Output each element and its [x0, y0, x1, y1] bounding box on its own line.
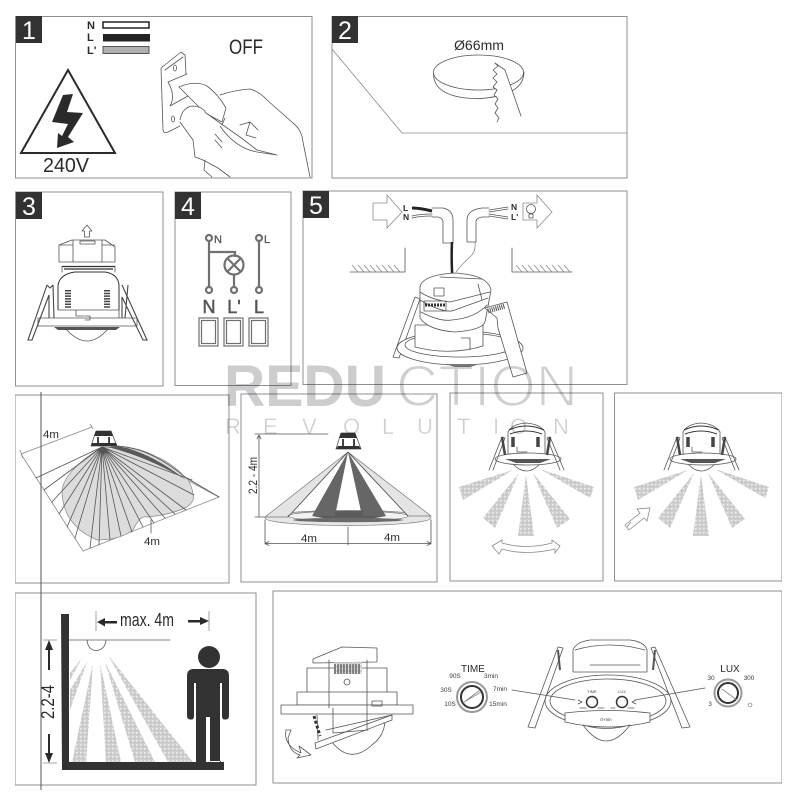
lower dimension tick [150, 520, 152, 533]
step badge 4 [175, 192, 201, 221]
dimension line [20, 424, 93, 458]
watermark word light part: CTION [396, 354, 578, 419]
panel 9: approach movement [614, 393, 782, 581]
terminal letters top: L [264, 234, 270, 246]
watermark word bold part: REDU [224, 354, 386, 419]
lux dial: ☼ [746, 699, 754, 709]
wire legend: L [87, 32, 94, 44]
dimension label 4m: 4m [43, 429, 59, 441]
panel 5: mains connection [303, 191, 627, 384]
panel 6: top-view detection zone [15, 395, 229, 583]
panel 11: adjustment dials [273, 591, 782, 783]
step badge 1: 1 [22, 17, 36, 45]
double curved arrow [492, 540, 560, 554]
wire legend: L' [87, 45, 97, 57]
beams [634, 469, 769, 536]
lux dial: 300 [744, 675, 755, 682]
detection zone [21, 446, 219, 551]
panel 8: lateral movement [450, 393, 603, 581]
watermark subtitle: REVOLUTION [225, 414, 569, 439]
beams [459, 469, 594, 536]
terminal labels: L' [227, 297, 241, 317]
dimension labels: 4m [384, 532, 400, 544]
icon: sensor body [393, 273, 527, 377]
icon: front sensor: TIME [587, 689, 597, 694]
wire labels [403, 202, 518, 222]
step badge 2: 2 [338, 17, 352, 45]
icon: front sensor: 0-min [600, 717, 612, 722]
wall sections [350, 248, 572, 272]
panel 3: remove terminal cover [16, 192, 163, 386]
time dial: 90S [449, 673, 461, 680]
terminal letters top [214, 234, 270, 246]
height label: 2.2-4 [38, 685, 58, 719]
step badge 3: 3 [22, 193, 36, 221]
time dial: 15min [489, 701, 507, 708]
wire labels: N [403, 212, 409, 222]
OFF label: OFF [229, 36, 263, 59]
light beams [70, 655, 193, 762]
pointer lines [512, 688, 705, 700]
vertical scan line [40, 392, 42, 790]
icon: hole and saw [434, 55, 524, 122]
dimension label 4m: 4m [144, 536, 160, 548]
detection cone [265, 452, 431, 526]
arrow toward sensor [625, 508, 650, 530]
arrow out with bulb [523, 195, 552, 228]
lux dial: LUX [720, 664, 740, 675]
wire legend [87, 20, 150, 57]
terminal boxes [199, 318, 268, 346]
time dial: 10S [444, 701, 456, 708]
time dial: 3min [484, 673, 498, 680]
step badge 5 [303, 191, 329, 220]
time dial: 7min [493, 686, 507, 693]
step badge 5: 5 [309, 192, 323, 220]
arrow in [373, 195, 402, 228]
watermark logo [224, 354, 578, 439]
panel 2: drill hole [332, 16, 627, 178]
wire legend: N [87, 20, 95, 32]
wall and floor [61, 614, 224, 770]
ceiling outline [332, 49, 627, 133]
range label: max. 4m [120, 610, 174, 630]
wire labels: L' [511, 212, 518, 222]
step badge 2 [332, 16, 358, 45]
panel 7: side-view detection cone [241, 394, 437, 582]
height dimension [43, 640, 57, 763]
step badge 1 [16, 16, 42, 45]
warning triangle with lightning bolt [21, 70, 115, 153]
wire labels: L [403, 203, 408, 213]
time dial: TIME [461, 664, 485, 675]
icon: side sensor with tilted head [281, 647, 413, 754]
icon: person [187, 646, 229, 762]
dimension labels [301, 532, 400, 545]
lux dial: 30 [707, 675, 715, 682]
icon: front sensor [528, 640, 690, 741]
time dial [440, 664, 507, 712]
icon: front sensor: LUX [618, 689, 626, 694]
height dimension [255, 434, 328, 517]
icon: sensor with cover lifted [28, 240, 147, 341]
lux dial: 3 [708, 701, 712, 708]
terminal labels: L [254, 297, 264, 317]
hole diameter label: Ø66mm [454, 38, 504, 53]
voltage label: 240V [43, 155, 90, 177]
terminal letters top: N [214, 234, 222, 246]
terminal labels: N [202, 297, 216, 317]
step badge 4: 4 [181, 193, 195, 221]
curved rotation arrow [286, 730, 311, 758]
panel 10: mounting height and range [15, 593, 256, 785]
terminal labels [202, 297, 264, 317]
icon: sensor top [91, 431, 117, 446]
icon: sensor [489, 423, 564, 471]
icon: sensor [336, 433, 361, 449]
arrow up [82, 225, 92, 237]
lux dial [707, 664, 755, 709]
panel 4: wiring diagram [175, 192, 291, 386]
time dial: 30S [440, 687, 452, 694]
wire labels: N [511, 202, 517, 212]
icon: sensor [664, 423, 739, 471]
icon: wall switch and hand [161, 52, 310, 177]
height label: 2.2 - 4m [246, 457, 260, 494]
conduits and wires [412, 207, 508, 287]
dimension labels: 4m [301, 533, 317, 545]
step badge 3 [16, 192, 42, 221]
wiring schematic [206, 235, 262, 293]
width dimension [265, 520, 431, 546]
panel 1: switch off power [16, 16, 312, 178]
range dimension [96, 611, 209, 631]
ceiling and sensor dome [69, 640, 170, 650]
